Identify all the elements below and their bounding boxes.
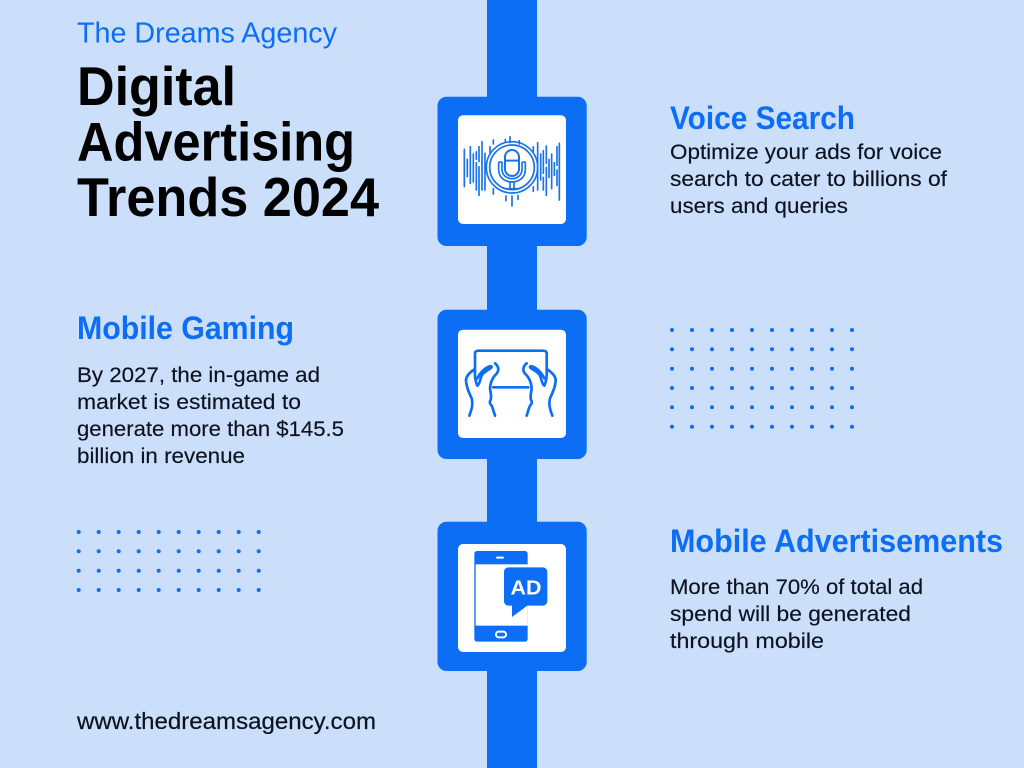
- dot pattern: left: [77, 530, 261, 592]
- panel: mobile advertisements text: Mobile Advertisements: [670, 523, 1003, 559]
- panel: mobile advertisements text: [670, 523, 1003, 653]
- panel: mobile gaming text: billion in revenue: [77, 445, 245, 468]
- icon tile: mobile advertisements: AD: [510, 577, 541, 599]
- panel: mobile gaming text: [77, 310, 344, 468]
- panel: mobile gaming text: By 2027, the in-game ad: [77, 364, 320, 387]
- panel: mobile advertisements text: spend will be generated: [670, 603, 911, 626]
- panel: voice search text: users and queries: [670, 195, 848, 218]
- icon tile: mobile gaming: [438, 310, 587, 459]
- panel: mobile gaming text: generate more than $145.5: [77, 418, 344, 441]
- title: Advertising: [77, 110, 355, 172]
- title: Digital: [77, 55, 236, 117]
- panel: mobile advertisements text: through mobile: [670, 630, 824, 653]
- title: Trends 2024: [77, 166, 379, 228]
- panel: mobile advertisements text: More than 70% of total ad: [670, 576, 923, 599]
- panel: voice search text: Voice Search: [670, 100, 855, 136]
- panel: voice search text: search to cater to billions of: [670, 168, 947, 191]
- title: [77, 55, 379, 228]
- panel: mobile gaming text: market is estimated to: [77, 391, 301, 414]
- panel: voice search text: [670, 100, 947, 218]
- panel: mobile gaming text: Mobile Gaming: [77, 310, 294, 346]
- central vertical bar: [487, 0, 537, 768]
- website url: www.thedreamsagency.com: [76, 708, 376, 734]
- panel: voice search text: Optimize your ads for voice: [670, 141, 942, 164]
- icon tile: mobile advertisements: [438, 522, 587, 671]
- dot pattern: right: [670, 328, 854, 429]
- agency name: The Dreams Agency: [77, 18, 337, 50]
- icon tile: voice search: [438, 97, 587, 246]
